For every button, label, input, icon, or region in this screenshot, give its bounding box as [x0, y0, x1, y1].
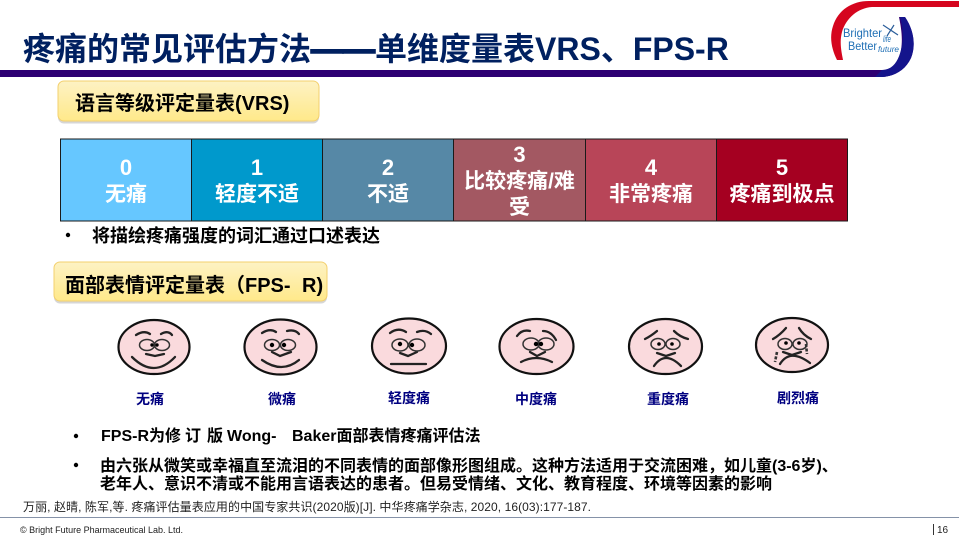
cell 3: 比较疼痛/难 — [464, 169, 575, 193]
FPS-R bullets: FPS-R为修 — [101, 428, 181, 445]
logo — [843, 25, 900, 54]
face labels: 轻度痛 — [388, 390, 430, 406]
face labels: 无痛 — [136, 391, 164, 407]
cell 4: 非常疼痛 — [609, 182, 693, 206]
face: no pain — [118, 320, 190, 374]
cell 3 — [454, 139, 586, 221]
VRS scale table — [60, 139, 848, 221]
face: extreme pain — [756, 318, 828, 372]
cell 3: 3 — [513, 142, 526, 167]
FPS-R bullets: 由六张从微笑或幸福直至流泪的不同表情的面部像形图组成。这种方法适用于交流困难，如儿童(3-6岁)、 — [100, 456, 838, 475]
FPS-R bullets: 订 — [185, 427, 201, 445]
face labels: 重度痛 — [647, 391, 689, 407]
cell 3: 受 — [509, 196, 530, 219]
callout: FPS-R heading — [54, 262, 327, 304]
face: moderate pain — [500, 319, 574, 374]
logo: life — [883, 34, 891, 44]
cell 2 — [322, 139, 454, 221]
FPS-R bullets: Wong- — [227, 428, 276, 445]
face: severe pain — [629, 319, 702, 374]
logo: future — [878, 45, 900, 54]
callout: FPS-R heading: R) — [302, 275, 323, 297]
callout: VRS heading — [58, 81, 319, 124]
face: slight pain — [244, 320, 316, 374]
logo: Better — [848, 39, 877, 53]
cell 5 — [716, 139, 848, 221]
cell 1: 轻度不适 — [215, 183, 299, 206]
cell 1 — [192, 139, 322, 221]
page number: 16 — [937, 525, 949, 536]
cell 5: 5 — [776, 155, 788, 180]
cell 0: 无痛 — [105, 182, 147, 206]
face labels: 中度痛 — [515, 391, 557, 407]
cell 4: 4 — [645, 155, 658, 180]
face: mild pain — [372, 318, 446, 374]
cell 2: 不适 — [367, 183, 409, 206]
footer rule — [0, 517, 959, 518]
cell 4 — [586, 139, 716, 221]
FPS-R bullets: 老年人、意识不清或不能用言语表达的患者。但易受情绪、文化、教育程度、环境等因素的影响 — [100, 474, 772, 493]
cell 0: 0 — [120, 155, 132, 180]
face labels: 微痛 — [268, 391, 296, 407]
FPS-R bullets — [74, 426, 838, 493]
cell 2: 2 — [382, 155, 394, 180]
citation: 万丽, 赵晴, 陈军,等. 疼痛评估量表应用的中国专家共识(2020版)[J]. 中华疼痛学杂志, 2020, 16(03):177-187. — [23, 499, 591, 514]
footer copyright: © Bright Future Pharmaceutical Lab. Ltd. — [20, 525, 183, 535]
face labels — [136, 390, 819, 407]
logo: Brighter — [843, 26, 882, 40]
page number — [933, 524, 949, 536]
title: 疼痛的常见评估方法——单维度量表VRS、FPS-R — [23, 31, 729, 67]
FPS-R bullets: Baker面部表情疼痛评估法 — [292, 426, 480, 445]
callout: FPS-R heading: 面部表情评定量表（ — [65, 275, 245, 297]
FPS-R bullets: 版 — [207, 427, 223, 445]
VRS bullet: 将描绘疼痛强度的词汇通过口述表达 — [92, 225, 380, 246]
callout: VRS heading: 语言等级评定量表(VRS) — [75, 91, 289, 115]
cell 1: 1 — [251, 155, 263, 180]
cell 5: 疼痛到极点 — [730, 182, 834, 206]
face labels: 剧烈痛 — [777, 390, 819, 406]
callout: FPS-R heading: FPS- — [245, 275, 291, 297]
cell 0 — [60, 139, 192, 221]
header band and brand arcs — [0, 1, 959, 77]
